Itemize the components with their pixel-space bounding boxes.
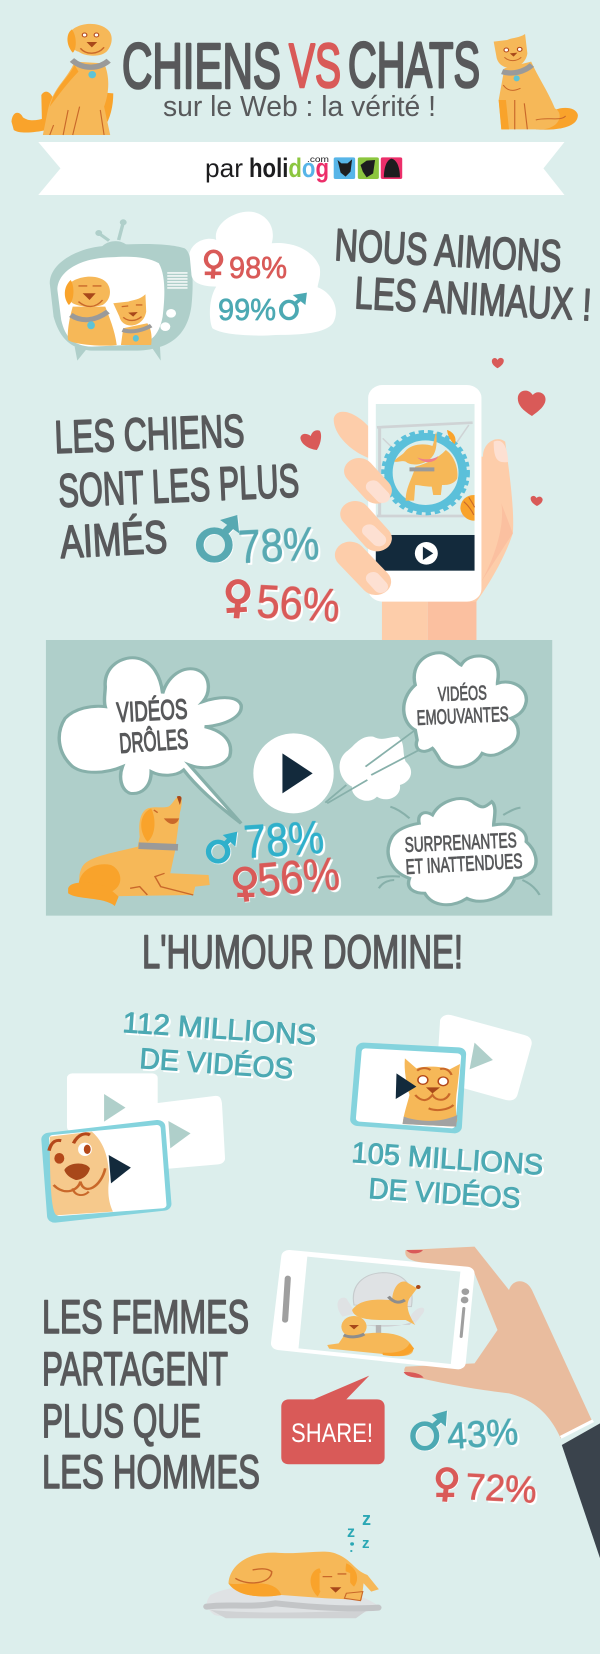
icon: landscape smartphone — [279, 1257, 469, 1364]
stat: men 43%: 43% — [446, 1411, 519, 1457]
icon: hand holding phone — [334, 412, 513, 641]
phone and hand artwork — [200, 385, 546, 641]
icon: male symbol — [413, 1411, 447, 1448]
panel: video types — [46, 640, 552, 916]
sharing artwork — [207, 1247, 600, 1619]
heading: l'humour domine: L'HUMOUR DOMINE! — [142, 925, 463, 978]
speech bubble: surprising videos — [388, 799, 536, 905]
heading: les femmes partagent plus que les hommes: LES FEMMES — [42, 1290, 249, 1343]
video cards artwork — [49, 1015, 532, 1216]
label: share: SHARE! — [291, 1418, 373, 1448]
icon: female symbol — [436, 1469, 456, 1502]
speech bubble: funny videos — [59, 658, 241, 823]
heading: nous aimons les animaux — [333, 219, 593, 330]
icon: lying dog — [68, 796, 210, 906]
label: vidéos drôles — [116, 693, 189, 759]
heading: les femmes partagent plus que les hommes: PARTAGENT — [42, 1342, 228, 1395]
icon: fingers — [350, 471, 383, 587]
label: vidéos drôles: DRÔLES — [118, 723, 189, 759]
stat: 112 millions de vidéos: 112 MILLIONS — [122, 1007, 317, 1052]
icon: smoke puff — [325, 730, 419, 803]
sleep letters: z — [362, 1535, 370, 1552]
icon: heart large — [518, 391, 546, 416]
cloud behind percentages — [189, 212, 336, 336]
icon: heart medium — [300, 430, 321, 450]
icon: woman's hand — [404, 1247, 592, 1438]
sleep letters: z — [347, 1524, 355, 1541]
stat: men 99%: 99% — [218, 292, 276, 327]
title: CHATS — [348, 29, 480, 101]
icon: sleep dots — [350, 1542, 354, 1552]
icon: back video card left — [67, 1073, 158, 1132]
icon: sleeping dog on pillow — [207, 1552, 379, 1619]
stat: 112 millions de vidéos: DE VIDÉOS — [139, 1042, 294, 1086]
heading: les femmes partagent plus que les hommes: LES HOMMES — [42, 1445, 260, 1498]
icon: front video card with dog — [49, 1127, 164, 1216]
title: CHIENS — [122, 30, 281, 102]
heading: les chiens sont les plus aimés — [54, 404, 300, 568]
byline — [205, 153, 329, 183]
subtitle: sur le Web : la vérité ! — [163, 91, 436, 123]
heading: les chiens sont les plus aimés: LES CHIENS — [54, 404, 245, 463]
title: VS — [289, 32, 341, 101]
icon: male symbol — [200, 515, 239, 559]
stat: 105 millions de vidéos — [351, 1137, 544, 1215]
icon: heart — [492, 358, 504, 368]
icon: smartphone — [368, 385, 481, 602]
stat: men 78%: 78% — [242, 811, 326, 868]
heading: les femmes partagent plus que les hommes — [42, 1290, 260, 1498]
icon: second video card left — [155, 1096, 225, 1169]
stat: women 98%: 98% — [229, 250, 287, 285]
heading: les chiens sont les plus aimés: AIMÉS — [59, 510, 168, 568]
icon: male symbol — [209, 832, 237, 861]
stat: 105 millions de vidéos: 105 MILLIONS — [351, 1137, 544, 1182]
label: vidéos émouvantes — [416, 681, 509, 730]
stat: women 56%: 56% — [255, 847, 342, 906]
icon: female symbol — [235, 869, 254, 902]
holidog logo icons — [334, 157, 402, 179]
label: vidéos émouvantes: EMOUVANTES — [416, 703, 509, 730]
label: surprenantes et inattendues: SURPRENANTES — [404, 829, 517, 857]
icon: chair with two dogs — [327, 1273, 424, 1356]
sleep letters: z — [362, 1509, 371, 1529]
heading: les chiens sont les plus aimés: SONT LES PLUS — [57, 454, 300, 517]
ribbon banner — [38, 142, 564, 195]
header artwork — [11, 24, 578, 368]
label: surprenantes et inattendues — [404, 829, 523, 879]
icon: jacket sleeve — [561, 1421, 600, 1558]
icon: heart small — [531, 496, 543, 506]
stat: 112 millions de vidéos — [122, 1007, 317, 1086]
stat: women 56%: 56% — [255, 575, 341, 631]
title — [122, 29, 480, 102]
label: surprenantes et inattendues: ET INATTENDUES — [405, 850, 523, 879]
speech bubble: share — [281, 1376, 385, 1464]
stat: men 78%: 78% — [237, 517, 320, 573]
byline: .com — [307, 155, 329, 164]
stat: 105 millions de vidéos: DE VIDÉOS — [368, 1172, 521, 1215]
icon: front video card with cat — [358, 1049, 460, 1127]
speech bubble: moving videos — [404, 653, 526, 767]
byline: holidog — [249, 153, 329, 183]
icon: sitting dog — [11, 24, 113, 135]
icon: male symbol — [281, 293, 307, 319]
label: vidéos émouvantes: VIDÉOS — [437, 681, 487, 706]
icon: television with dog and cat — [50, 219, 193, 361]
label: vidéos drôles: VIDÉOS — [116, 693, 188, 728]
stat: women 72%: 72% — [465, 1466, 538, 1511]
icon: sitting cat — [494, 34, 578, 130]
icon: back video card right — [436, 1015, 532, 1100]
icon: female symbol — [205, 251, 221, 279]
byline: par — [205, 153, 243, 183]
sleep letters — [347, 1509, 371, 1552]
icon: female symbol — [227, 582, 248, 618]
heading: les femmes partagent plus que les hommes: PLUS QUE — [42, 1394, 201, 1447]
icon: play button — [253, 733, 334, 813]
